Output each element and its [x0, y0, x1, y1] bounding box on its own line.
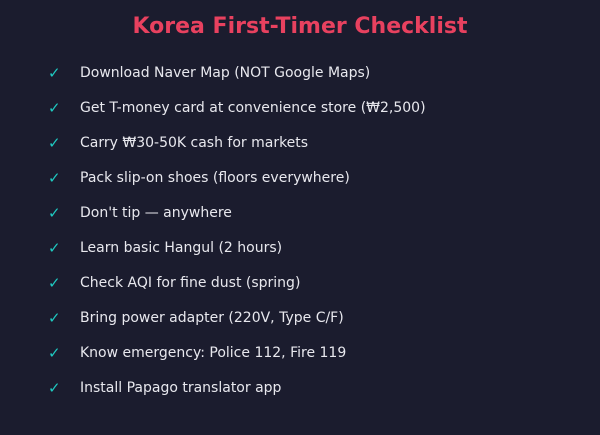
checklist: Install Papago translator app [80, 380, 281, 396]
checklist: ✓ [48, 379, 61, 397]
checklist: ✓ [48, 239, 61, 257]
checklist: Learn basic Hangul (2 hours) [80, 240, 282, 256]
checklist: Download Naver Map (NOT Google Maps) [80, 65, 370, 81]
title: Korea First-Timer Checklist [132, 14, 467, 39]
item 3 [48, 134, 308, 152]
checklist: Pack slip-on shoes (floors everywhere) [80, 170, 350, 186]
checklist: Get T-money card at convenience store (₩2,500) [80, 100, 426, 116]
checklist: ✓ [48, 99, 61, 117]
checklist: ✓ [48, 204, 61, 222]
checklist: Know emergency: Police 112, Fire 119 [80, 345, 346, 361]
item 10 [48, 379, 281, 397]
item 4 [48, 169, 350, 187]
item 6 [48, 239, 282, 257]
checklist: ✓ [48, 274, 61, 292]
checklist: ✓ [48, 64, 61, 82]
item 1 [48, 64, 370, 82]
checklist: ✓ [48, 344, 61, 362]
checklist: Don't tip — anywhere [80, 205, 232, 221]
item 8 [48, 309, 344, 327]
checklist: ✓ [48, 134, 61, 152]
item 2 [48, 99, 426, 117]
checklist: Check AQI for fine dust (spring) [80, 275, 300, 291]
item 7 [48, 274, 300, 292]
checklist: Bring power adapter (220V, Type C/F) [80, 310, 344, 326]
checklist: ✓ [48, 169, 61, 187]
checklist: ✓ [48, 309, 61, 327]
item 9 [48, 344, 346, 362]
item 5 [48, 204, 232, 222]
checklist: Carry ₩30-50K cash for markets [80, 135, 308, 151]
